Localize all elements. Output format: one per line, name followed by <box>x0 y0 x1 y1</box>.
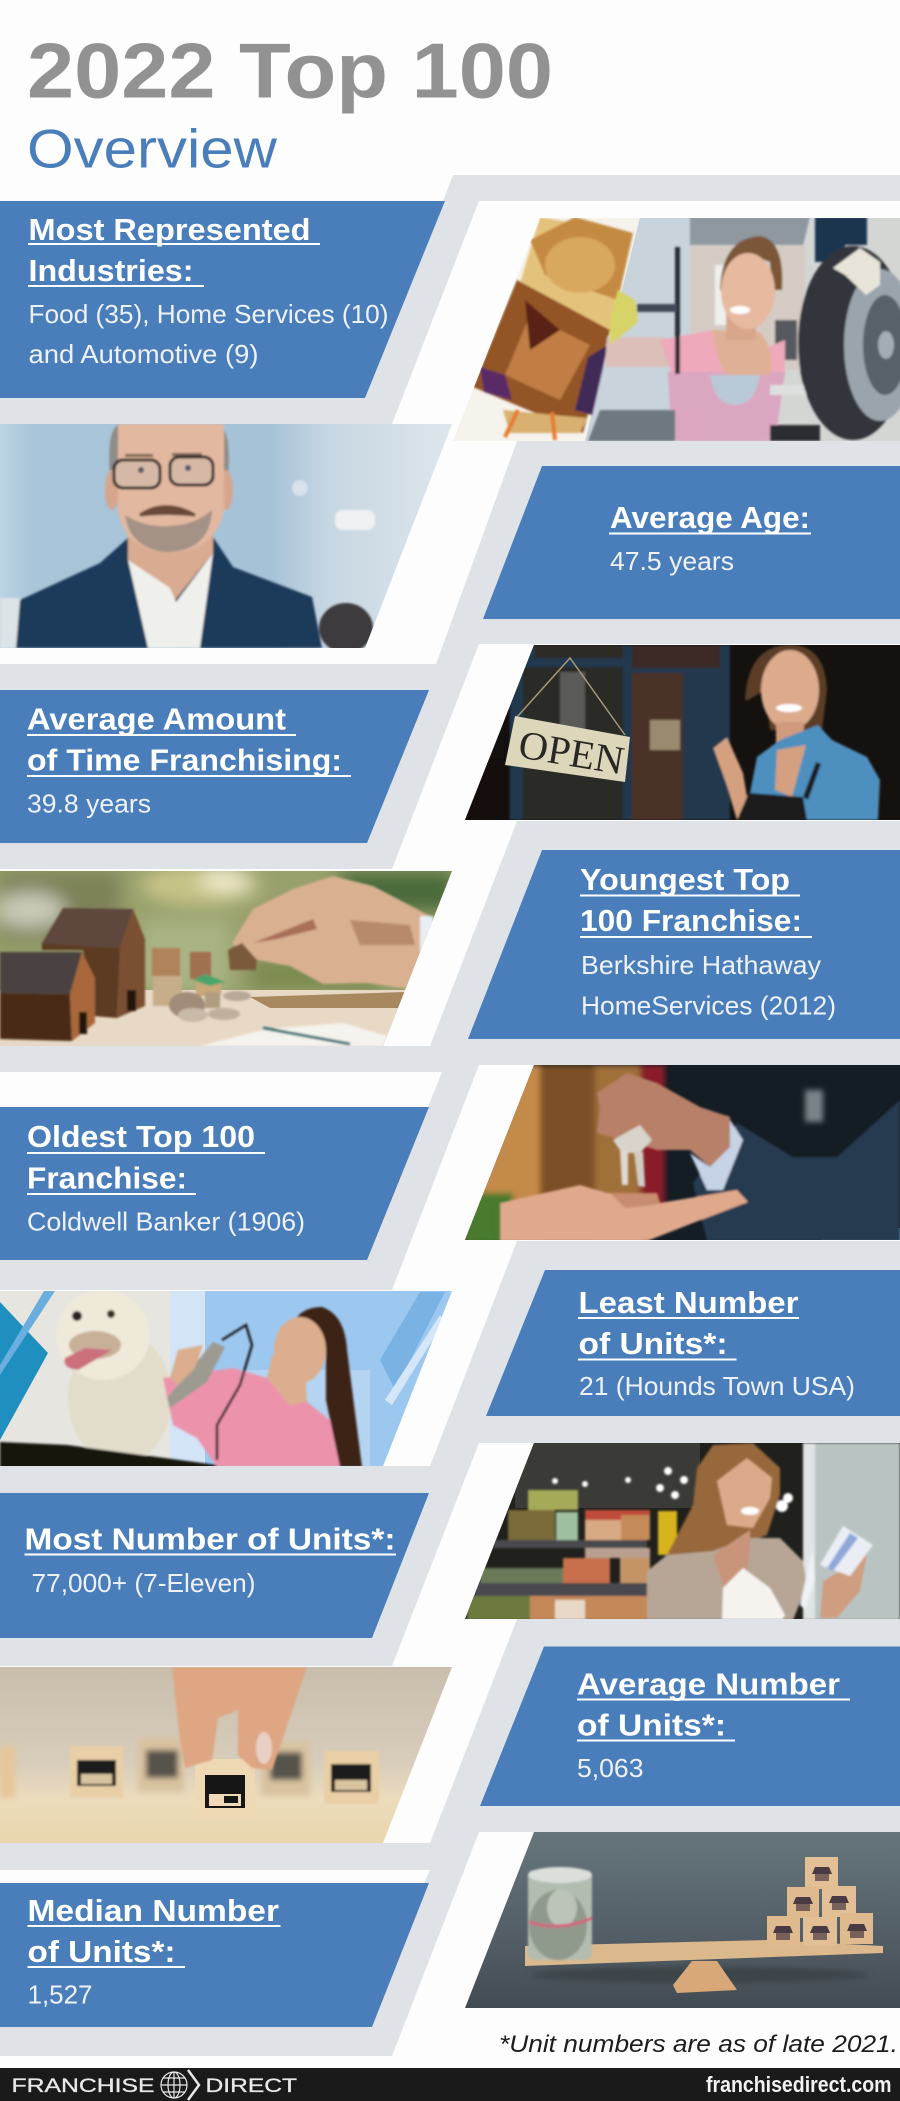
panel: oldest top 100 franchise: Franchise: <box>27 1162 187 1196</box>
white strip above median panel <box>0 1870 430 1883</box>
panel: average age <box>483 466 900 619</box>
panel: oldest top 100 franchise: Coldwell Banker (1906) <box>27 1206 305 1236</box>
panel: average amount of time franchising: of Time Franchising: <box>27 744 342 778</box>
subtitle: Overview <box>27 118 277 180</box>
image: scale balancing money and stores <box>465 1832 900 2008</box>
sign strings <box>517 658 625 735</box>
panel: median number of units: 1,527 <box>28 1980 92 2010</box>
footnote: *Unit numbers are as of late 2021. <box>499 2031 898 2058</box>
panel: average amount of time franchising <box>0 690 429 843</box>
panel: youngest top 100 franchise: HomeServices (2012) <box>581 990 836 1020</box>
panel: average age: 47.5 years <box>610 546 734 576</box>
panel: average number of units <box>480 1646 900 1806</box>
panel: average amount of time franchising: 39.8 years <box>27 788 151 818</box>
panel: median number of units <box>0 1883 429 2027</box>
background band 3 <box>0 821 900 1290</box>
woman <box>713 645 880 820</box>
image: hand placing miniature houses <box>0 865 455 1046</box>
right store block <box>324 1751 379 1804</box>
panel: most number of units: Most Number of Units*: <box>24 1522 396 1556</box>
panel: most represented industries: Industries: <box>28 254 194 288</box>
stacked store blocks <box>767 1857 873 1947</box>
panel: youngest top 100 franchise: 100 Franchise: <box>580 904 802 938</box>
panel: average number of units: of Units*: <box>577 1708 726 1742</box>
background band 4 <box>0 1241 900 1666</box>
image: dog groomer <box>0 1290 455 1470</box>
background band 5 <box>0 1619 900 2056</box>
fingers <box>172 1667 307 1770</box>
panel: most number of units <box>0 1493 429 1638</box>
panel: most represented industries: and Automotive (9) <box>28 339 258 369</box>
panel: oldest top 100 franchise: Oldest Top 100 <box>27 1120 255 1154</box>
panel: most represented industries: Food (35), Home Services (10) <box>28 299 388 329</box>
panel: least number of units: 21 (Hounds Town USA) <box>579 1371 855 1401</box>
image: shop owner with open sign <box>465 645 900 820</box>
left store block <box>70 1746 123 1798</box>
panel: average amount of time franchising: Average Amount <box>27 702 286 736</box>
image: shopper in grocery store <box>465 1443 900 1620</box>
panel: most represented industries <box>0 201 445 398</box>
panel: least number of units: Least Number <box>578 1286 799 1320</box>
icon: globe logo <box>161 2070 199 2100</box>
panel: most represented industries: Most Represented <box>28 213 310 247</box>
panel: average number of units: Average Number <box>577 1668 840 1702</box>
panel: oldest top 100 franchise <box>0 1107 429 1260</box>
panel: median number of units: Median Number <box>28 1894 279 1928</box>
money roll <box>528 1867 592 1960</box>
white strip above oldest panel <box>0 1072 442 1107</box>
panel: youngest top 100 franchise <box>468 850 900 1039</box>
panel: youngest top 100 franchise: Berkshire Hathaway <box>581 950 821 980</box>
brand name right: DIRECT <box>206 2076 297 2097</box>
image: portrait of businessman <box>0 424 452 653</box>
image: handing over keys <box>465 1065 900 1243</box>
image: fingers placing store block <box>0 1667 452 1843</box>
panel: least number of units <box>486 1270 900 1416</box>
panel: youngest top 100 franchise: Youngest Top <box>580 863 790 897</box>
title: 2022 Top 100 <box>27 26 553 114</box>
background band 2 <box>0 441 900 869</box>
panel: median number of units: of Units*: <box>28 1935 176 1969</box>
center store block <box>195 1759 255 1808</box>
brand name left: FRANCHISE <box>12 2076 154 2097</box>
footer bar <box>0 2068 900 2101</box>
panel: average number of units: 5,063 <box>577 1753 644 1783</box>
image: food, cleaning and automotive collage <box>453 217 900 441</box>
panel: most number of units: 77,000+ (7-Eleven) <box>32 1568 256 1598</box>
panel: average age: Average Age: <box>610 501 810 535</box>
open sign: OPEN <box>516 721 627 783</box>
panel: least number of units: of Units*: <box>578 1327 728 1361</box>
background band 1 <box>0 175 900 424</box>
